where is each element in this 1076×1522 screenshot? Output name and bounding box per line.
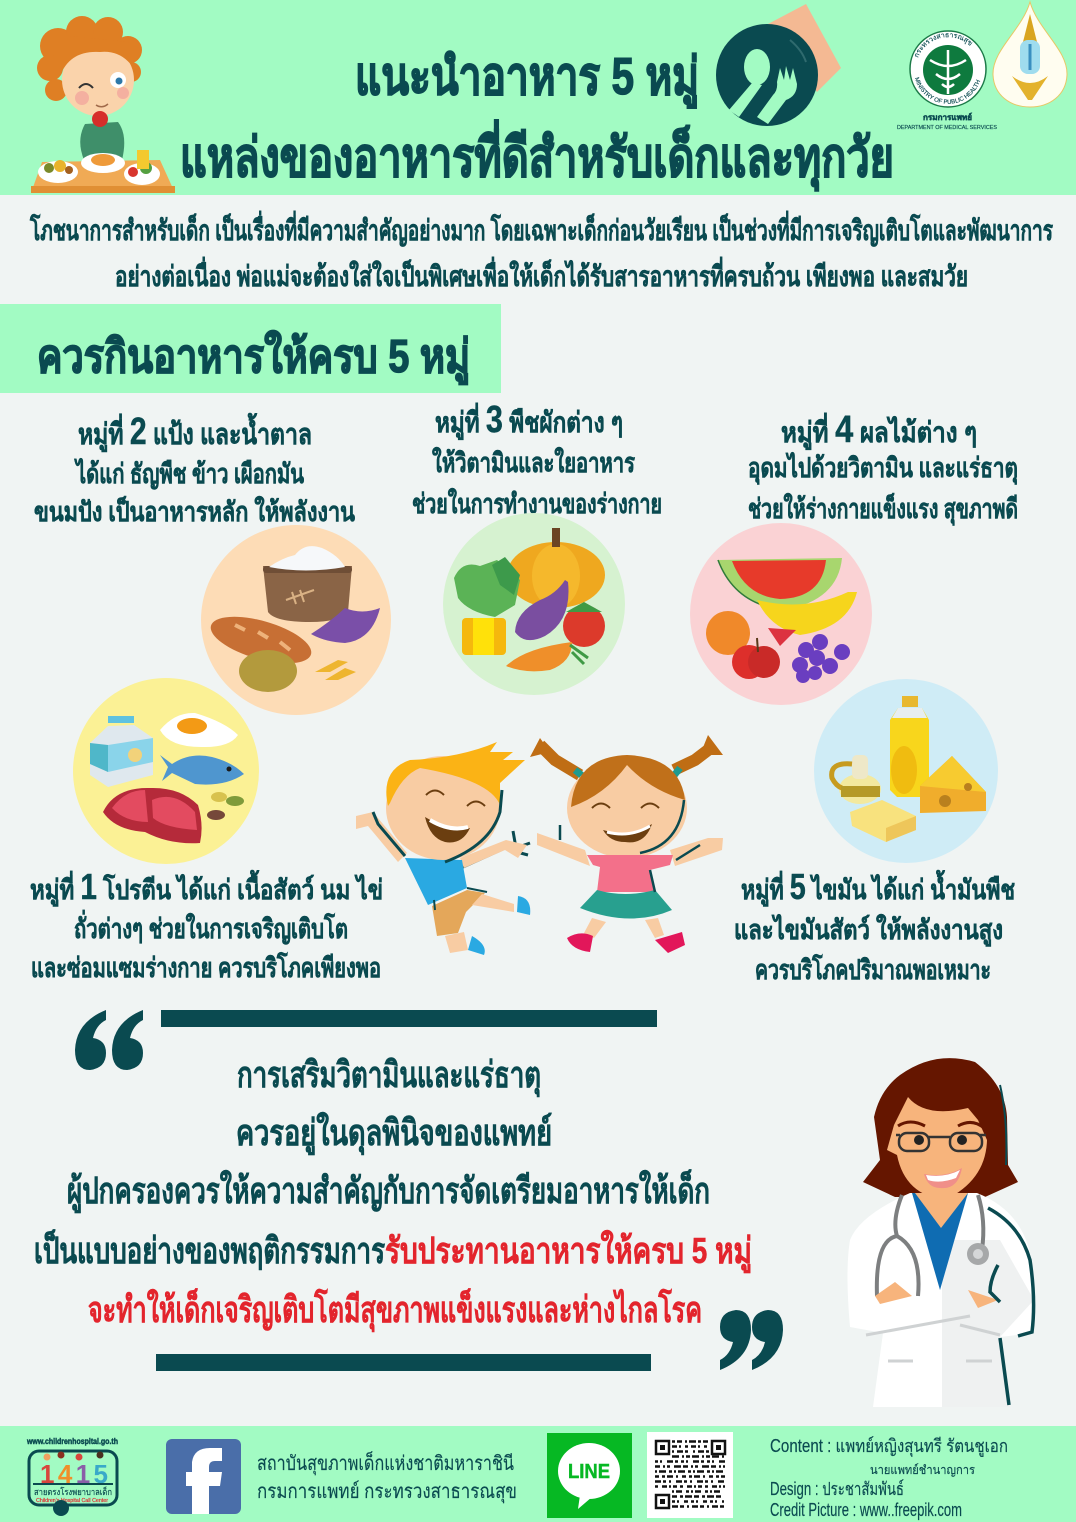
- title: [180, 48, 894, 192]
- text: credits: [770, 1436, 1008, 1520]
- logo: ministry of public health: กรมการแพทย์: [923, 112, 972, 122]
- text: group 2: หมู่ที่ 2 แป้ง และน้ำตาล: [78, 411, 312, 453]
- bottom rule: [156, 1354, 651, 1371]
- icon: line: [547, 1433, 632, 1518]
- intro text: [29, 210, 1053, 292]
- text: group 3: ให้วิตามินและใยอาหาร: [432, 447, 635, 478]
- text: group 4: [748, 409, 1018, 526]
- text: group 4: หมู่ที่ 4 ผลไม้ต่าง ๆ: [781, 409, 977, 451]
- illustration: happy boy: [356, 742, 530, 955]
- icon: group 2 starch circle: [201, 525, 391, 715]
- text: group 2: [34, 411, 355, 527]
- illustration: doctor: [848, 1058, 1034, 1407]
- logo: ministry of public health: กระทรวงสาธารณสุข: [914, 33, 972, 58]
- text: group 5: และไขมันสัตว์ ให้พลังงานสูง: [734, 914, 1003, 947]
- text: group 1: หมู่ที่ 1 โปรตีน ได้แก่ เนื้อสัตว์ นม ไข่: [30, 866, 383, 907]
- icon: plate with spoon and fork: [716, 4, 841, 126]
- icon: boy eating: [31, 16, 175, 193]
- logo: ministry of public health: [897, 30, 997, 131]
- text: credits: Credit Picture : www..freepik.com: [770, 1500, 962, 1520]
- logo: ministry of public health: MINISTRY OF PUBLIC HEALTH: [915, 77, 980, 104]
- icon: facebook: [166, 1439, 241, 1514]
- text: group 3: ช่วยในการทำงานของร่างกาย: [412, 488, 662, 519]
- icon: group 1 protein circle: [73, 678, 259, 864]
- quote text: [34, 1054, 752, 1333]
- quote text: จะทำให้เด็กเจริญเติบโตมีสุขภาพแข็งแรงและห่างไกลโรค: [88, 1287, 702, 1333]
- icon: group 3 vegetable circle: [443, 513, 625, 695]
- footer band: [0, 1426, 1076, 1522]
- section heading band: ควรกินอาหารให้ครบ 5 หมู่: [37, 329, 470, 385]
- logo: call center 1415: www.childrenhospital.go.th: [26, 1437, 118, 1446]
- icon: group 4 fruit circle: [690, 523, 872, 705]
- quote text: ผู้ปกครองควรให้ความสำคัญกับการจัดเตรียมอาหารให้เด็ก: [67, 1168, 710, 1214]
- icon: group 5 fat circle: [814, 679, 998, 863]
- quote text: เป็นแบบอย่างของพฤติกรรมการ: [34, 1228, 385, 1271]
- section heading band: [0, 304, 501, 393]
- logo: medical services drop: [993, 2, 1067, 107]
- text: group 1: [30, 866, 383, 983]
- header band: [0, 0, 1076, 195]
- text: hospital name: สถาบันสุขภาพเด็กแห่งชาติมหาราชินี: [257, 1450, 514, 1476]
- text: credits: นายแพทย์ชำนาญการ: [870, 1463, 976, 1477]
- quote text: การเสริมวิตามินและแร่ธาตุ: [237, 1054, 541, 1098]
- text: group 2: ได้แก่ ธัญพืช ข้าว เผือกมัน: [74, 458, 304, 490]
- top rule: [161, 1010, 657, 1027]
- icon: closing quote: [720, 1310, 783, 1370]
- quote text: รับประทานอาหารให้ครบ 5 หมู่: [385, 1229, 752, 1274]
- text: credits: Content : แพทย์หญิงสุนทรี รัตนชูเอก: [770, 1436, 1008, 1457]
- text: group 5: ควรบริโภคปริมาณพอเหมาะ: [755, 953, 991, 985]
- logo: ministry of public health: DEPARTMENT OF MEDICAL SERVICES: [897, 125, 997, 131]
- text: group 3: [412, 399, 662, 519]
- text: group 5: หมู่ที่ 5 ไขมัน ได้แก่ น้ำมันพืช: [741, 866, 1015, 907]
- logo: call center 1415: [26, 1437, 118, 1516]
- logo: call center 1415: 1415: [40, 1459, 108, 1489]
- text: hospital name: กรมการแพทย์ กระทรวงสาธารณสุข: [257, 1480, 517, 1504]
- logo: call center 1415: Children's Hospital Call Center: [36, 1498, 108, 1504]
- text: hospital name: [257, 1450, 517, 1504]
- text: group 1: ถั่วต่างๆ ช่วยในการเจริญเติบโต: [74, 909, 348, 945]
- text: group 2: ขนมปัง เป็นอาหารหลัก ให้พลังงาน: [34, 494, 355, 527]
- QR code: [647, 1432, 733, 1518]
- icon: line: LINE: [568, 1461, 610, 1483]
- quote text: ควรอยู่ในดุลพินิจของแพทย์: [236, 1111, 552, 1156]
- title: แนะนำอาหาร 5 หมู่: [355, 48, 699, 109]
- text: group 3: หมู่ที่ 3 พืชผักต่าง ๆ: [435, 399, 623, 441]
- text: credits: Design : ประชาสัมพันธ์: [770, 1479, 904, 1499]
- text: group 5: [734, 866, 1015, 985]
- logo: call center 1415: สายตรงโรงพยาบาลเด็ก: [34, 1485, 112, 1497]
- text: group 1: และซ่อมแซมร่างกาย ควรบริโภคเพียงพอ: [31, 951, 381, 983]
- icon: opening quote: [75, 1010, 143, 1070]
- illustration: happy girl: [530, 735, 723, 953]
